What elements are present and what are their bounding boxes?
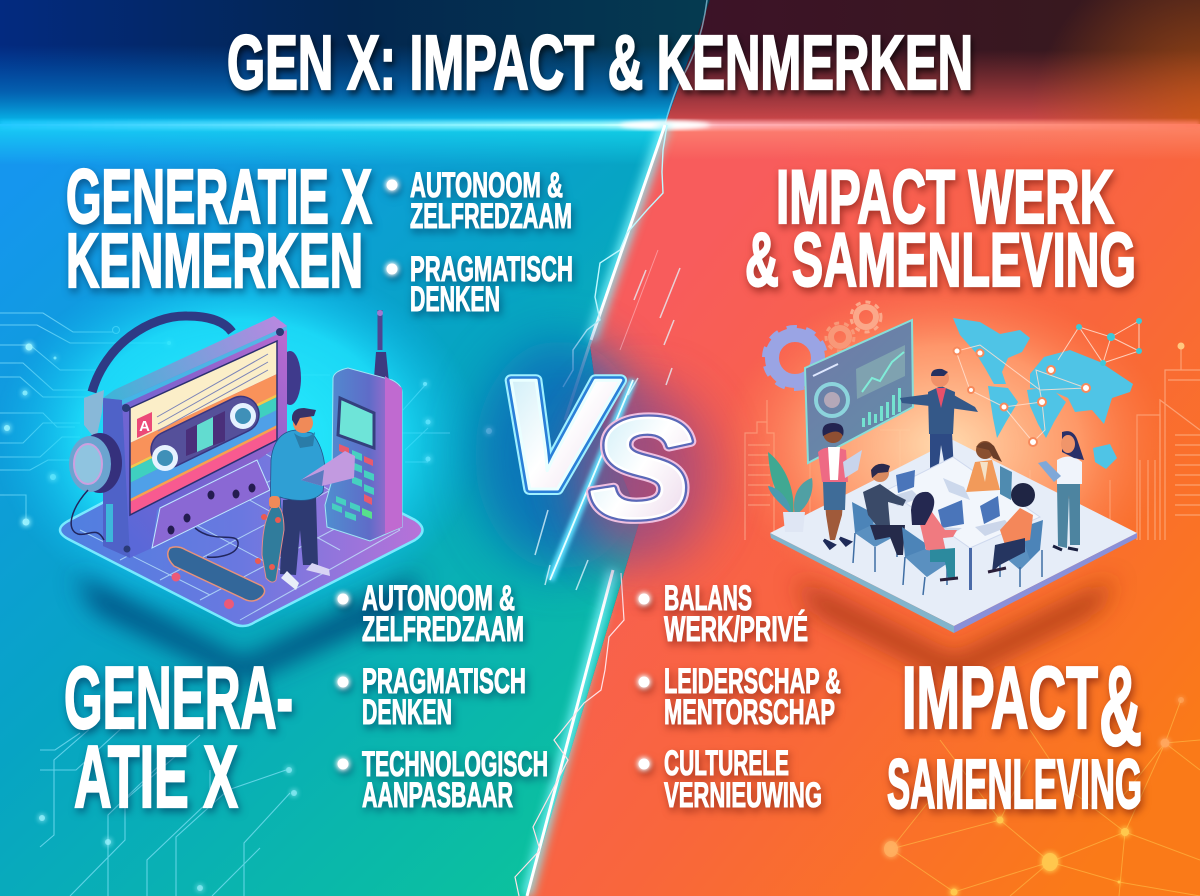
heading: Generatie X kenmerken: GENERATIE X <box>66 154 372 240</box>
seated person right <box>988 483 1043 587</box>
header band <box>0 0 1200 125</box>
heading: Impact en samenleving <box>887 643 1142 823</box>
list: bottom-right impacts: LEIDERSCHAP & <box>664 662 841 701</box>
VS glow: cool lobe <box>475 340 645 570</box>
background: left teal panel <box>0 125 665 896</box>
background: right coral panel <box>527 125 1200 896</box>
gear icons <box>765 302 881 388</box>
list: top-left traits: PRAGMATISCH <box>410 250 573 289</box>
background glow beneath header, right <box>653 125 1200 160</box>
list: bottom-left traits: DENKEN <box>362 693 452 732</box>
list: bottom-left traits: TECHNOLOGISCH <box>362 745 548 784</box>
letter V: V <box>497 347 621 523</box>
heading: Generatie X kenmerken <box>66 154 372 304</box>
header glow line <box>0 121 1200 129</box>
letter V: V <box>497 347 621 523</box>
list: bottom-right impacts: MENTORSCHAP <box>664 693 835 732</box>
centre streak <box>535 250 680 590</box>
scene halo <box>720 280 1170 610</box>
seated woman front <box>902 492 958 595</box>
list: top-left traits <box>386 166 573 319</box>
VS emblem <box>475 250 715 590</box>
cassette tag A: A <box>139 418 150 435</box>
platform shadow <box>795 580 1115 680</box>
standing skateboard <box>255 496 284 582</box>
circuit nodes: left panel <box>4 341 492 891</box>
headphone band <box>92 316 232 392</box>
heading: Genera-atie X: GENERA- <box>64 648 293 747</box>
scene halo <box>0 255 483 625</box>
VS glow: warm lobe <box>575 385 715 565</box>
background glow beneath header, left <box>0 125 665 165</box>
list: bottom-right impacts: VERNIEUWING <box>664 776 822 815</box>
city skyline: right panel <box>745 345 1200 540</box>
heading: Impact werk en samenleving <box>745 155 1136 303</box>
heading: Genera-atie X <box>64 648 293 826</box>
heading: Genera-atie X: ATIE X <box>74 727 238 826</box>
cassette window <box>145 390 265 474</box>
woman with tablet <box>1038 431 1084 550</box>
illustration: team meeting scene <box>720 280 1170 680</box>
list: bottom-left traits: AANPASBAAR <box>362 776 513 815</box>
heading: Generatie X kenmerken: KENMERKEN <box>66 218 363 304</box>
mobile phone <box>325 310 402 541</box>
circuit lines: left panel <box>0 313 450 896</box>
list: bottom-left traits: PRAGMATISCH <box>362 662 526 701</box>
cassette label stripes <box>130 341 277 515</box>
woman in pink <box>818 423 862 548</box>
person with hoodie <box>270 408 355 590</box>
list: top-left traits: DENKEN <box>410 280 500 319</box>
dashboard screen <box>805 320 913 463</box>
list: bottom-right impacts <box>638 579 841 815</box>
cassette tag A <box>137 412 152 438</box>
list: bottom-right impacts: BALANS <box>664 579 752 618</box>
meeting table <box>887 457 1040 590</box>
network nodes: bottom right <box>884 697 1200 896</box>
list: bottom-left traits <box>338 579 548 815</box>
flat skateboard <box>168 547 265 609</box>
presenter <box>900 369 978 473</box>
seated woman at back <box>966 441 1012 500</box>
plant <box>768 452 813 532</box>
skyline beacon <box>1178 342 1184 350</box>
letter S: S <box>590 389 692 548</box>
list: bottom-right impacts: CULTURELE <box>664 744 789 783</box>
laptops on table <box>885 470 1010 538</box>
meeting platform <box>770 440 1137 633</box>
cassette base <box>152 460 270 548</box>
list: bottom-left traits: ZELFREDZAAM <box>362 610 524 649</box>
letter S: S <box>590 389 692 548</box>
world map <box>953 318 1142 469</box>
list: bottom-left traits: AUTONOOM & <box>362 579 515 618</box>
letter S: S <box>590 389 692 548</box>
headphone right cup <box>279 351 301 405</box>
cassette body <box>103 316 287 558</box>
list: top-left traits: AUTONOOM & <box>410 166 563 205</box>
platform <box>60 434 422 626</box>
letter V: V <box>497 347 621 523</box>
lightning bolts and streaks <box>515 125 667 896</box>
list: top-left traits: ZELFREDZAAM <box>410 197 572 236</box>
headphone slider and left cup <box>69 390 238 557</box>
list: bottom-right impacts: WERK/PRIVÉ <box>664 609 808 649</box>
platform shadow <box>75 575 420 682</box>
heading: Impact en samenleving: & <box>1099 643 1142 769</box>
illustration: retro cassette scene <box>0 255 483 682</box>
seated man <box>852 464 906 572</box>
